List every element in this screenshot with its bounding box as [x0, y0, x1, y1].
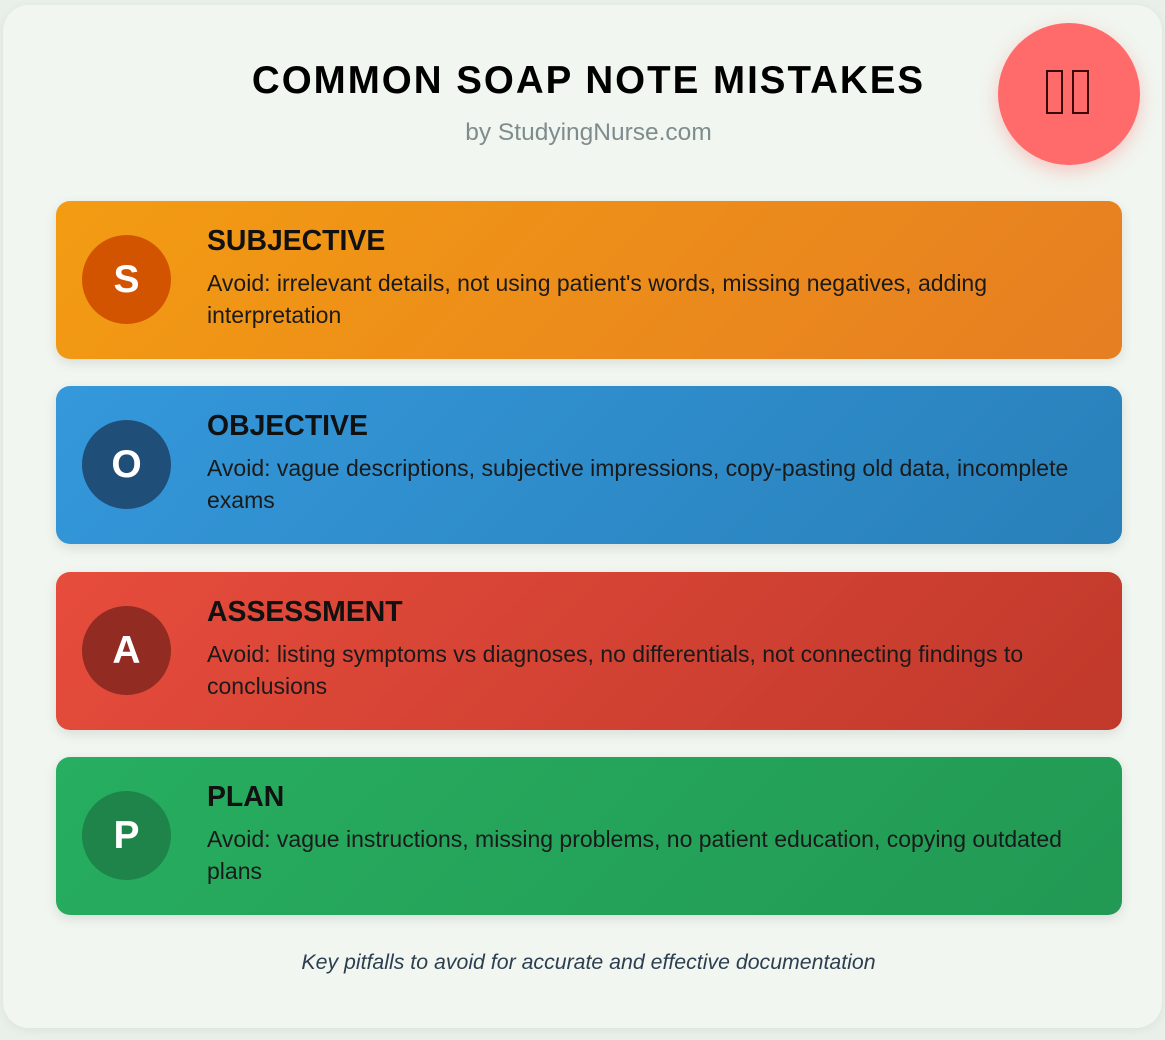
- icon: O: O: [111, 443, 142, 486]
- heading: plan: PLAN: [207, 781, 284, 813]
- heading: assessment: ASSESSMENT: [207, 596, 403, 628]
- text: assessment: Avoid: listing symptoms vs diagnoses, no differentials, not connecting findings to conclusions: [207, 641, 1023, 699]
- icon: A: [82, 606, 171, 695]
- title: COMMON SOAP NOTE MISTAKES: [252, 59, 925, 102]
- text: plan: Avoid: vague instructions, missing problems, no patient education, copying outdated plans: [207, 826, 1062, 884]
- heading: objective: OBJECTIVE: [207, 410, 368, 442]
- icon: S: [82, 235, 171, 324]
- icon: P: [82, 791, 171, 880]
- icon: A: A: [112, 629, 141, 672]
- icon: badge: [998, 23, 1140, 165]
- panel: objective: [56, 386, 1122, 544]
- subtitle: by StudyingNurse.com: [465, 119, 712, 146]
- panel: subjective: [56, 201, 1122, 359]
- panel: plan: [56, 757, 1122, 915]
- panel: assessment: [56, 572, 1122, 730]
- text: subjective: Avoid: irrelevant details, not using patient's words, missing negatives, adding interpretation: [207, 270, 987, 328]
- icon: P: P: [113, 814, 140, 857]
- text: objective: Avoid: vague descriptions, subjective impressions, copy-pasting old data, incomplete exams: [207, 455, 1068, 513]
- icon: S: S: [113, 258, 140, 301]
- icon: O: [82, 420, 171, 509]
- heading: subjective: SUBJECTIVE: [207, 225, 385, 257]
- footer: Key pitfalls to avoid for accurate and effective documentation: [301, 950, 876, 974]
